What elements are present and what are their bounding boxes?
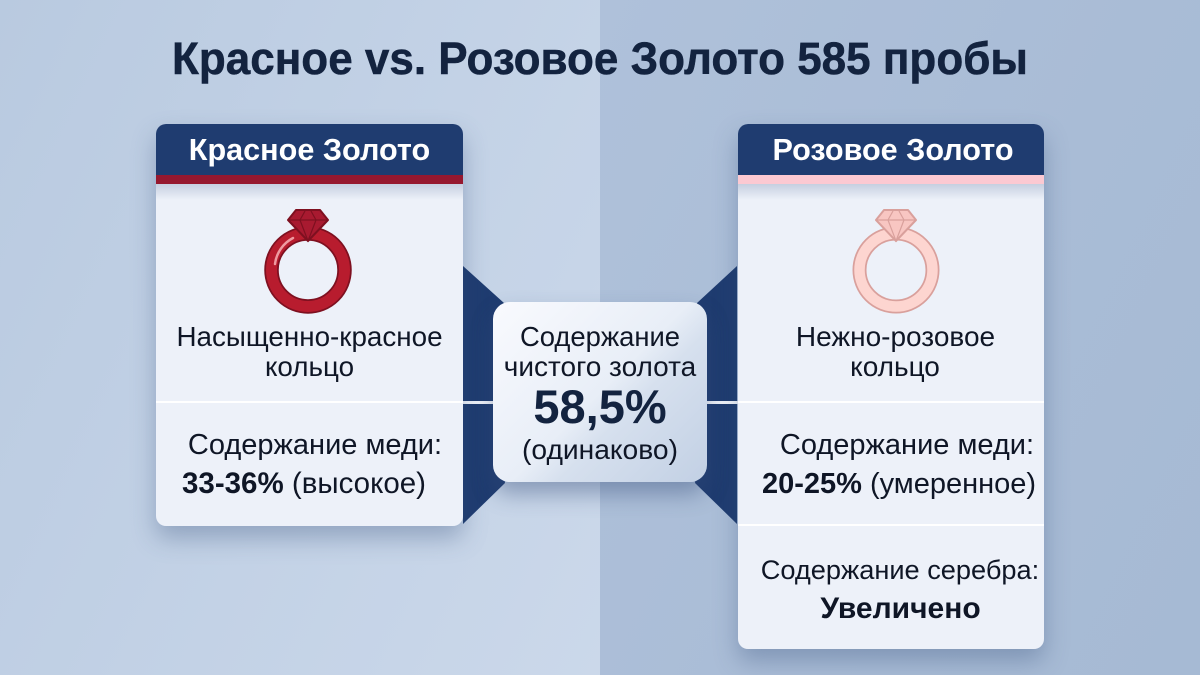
copper content: 33-36% (высокое) — [182, 467, 426, 500]
copper content: 20-25% (умеренное) — [762, 468, 1036, 500]
header: rose gold — [738, 124, 1044, 176]
panel: red gold — [156, 124, 463, 526]
callout: pure gold: Содержание — [520, 321, 680, 352]
label: rose ring: Нежно-розовое — [796, 321, 995, 352]
header: rose gold: Розовое Золото — [772, 132, 1014, 167]
icon: red ring — [264, 209, 352, 314]
label: red ring: кольцо — [265, 351, 354, 382]
copper content: Содержание меди: — [188, 429, 442, 461]
title: Красное vs. Розовое Золото 585 пробы — [172, 33, 1028, 84]
label: rose ring: кольцо — [850, 351, 940, 382]
callout: pure gold: (одинаково) — [522, 433, 678, 465]
copper content: Содержание меди: — [780, 429, 1034, 461]
header: red gold — [156, 124, 463, 176]
value: 58,5% — [533, 380, 667, 433]
callout: pure gold: чистого золота — [504, 351, 696, 382]
copper content — [182, 429, 442, 500]
panel: rose gold — [738, 124, 1044, 649]
label: rose ring — [796, 321, 995, 382]
icon: rose ring — [852, 209, 940, 314]
header: red gold: Красное Золото — [189, 132, 430, 167]
accent bar — [156, 175, 463, 184]
callout: pure gold — [493, 302, 707, 482]
copper content — [762, 429, 1036, 500]
silver content — [761, 554, 1039, 625]
label: red ring — [176, 321, 443, 382]
silver content: Увеличено — [820, 592, 981, 625]
silver content: Содержание серебра: — [761, 554, 1039, 585]
accent bar — [738, 175, 1044, 184]
label: red ring: Насыщенно-красное — [176, 321, 443, 352]
